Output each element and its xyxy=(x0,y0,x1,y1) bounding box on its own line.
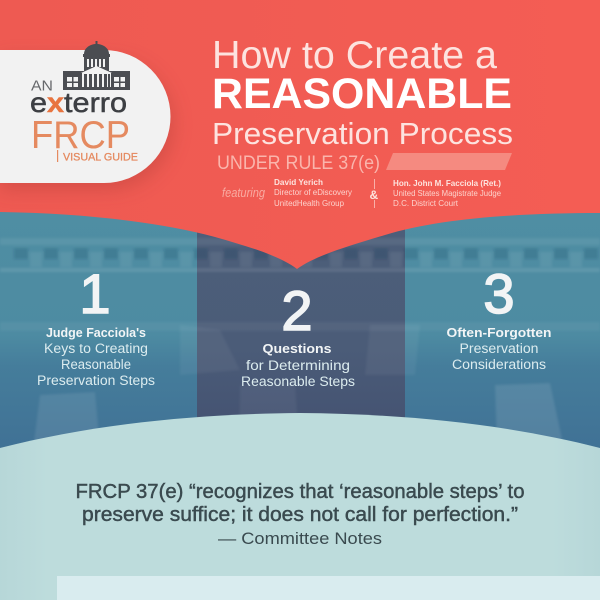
panel: logo badge xyxy=(0,41,170,183)
quote xyxy=(76,481,524,548)
speaker: Hon. John M. Facciola: D.C. District Court xyxy=(393,199,459,208)
column 1: Preservation Steps xyxy=(37,373,155,388)
quote: FRCP 37(e) “recognizes that ‘reasonable steps’ to xyxy=(76,481,524,503)
section edge shading xyxy=(0,413,600,600)
number 3: 3 xyxy=(483,262,515,325)
title: REASONABLE xyxy=(212,70,512,118)
speaker: David Yerich: Director of eDiscovery xyxy=(274,188,352,197)
column 1: Reasonable xyxy=(61,357,131,372)
column 2 xyxy=(241,279,355,389)
speaker: Hon. John M. Facciola: Hon. John M. Facciola (Ret.) xyxy=(393,179,501,188)
column 3: Considerations xyxy=(452,357,546,372)
subtitle: UNDER RULE 37(e) xyxy=(217,152,380,174)
attribution: — Committee Notes xyxy=(218,529,382,548)
panel: centre darker column xyxy=(197,205,405,465)
number 2: 2 xyxy=(281,279,313,342)
lower content box xyxy=(57,576,600,600)
featuring credits xyxy=(222,178,502,208)
speaker: David Yerich xyxy=(274,178,352,208)
panel: logo badge: VISUAL GUIDE xyxy=(63,152,138,164)
heading: Often-Forgotten xyxy=(446,325,552,340)
ampersand xyxy=(370,179,378,208)
title: How to Create a xyxy=(212,34,497,77)
quote: preserve suffice; it does not call for perfection.” xyxy=(82,504,518,526)
column 2: Reasonable Steps xyxy=(241,374,355,389)
panel: light teal quote section xyxy=(0,413,600,600)
title: Preservation Process xyxy=(212,116,513,151)
subtitle bar xyxy=(386,153,512,170)
title xyxy=(212,34,513,151)
speaker: Hon. John M. Facciola: United States Magistrate Judge xyxy=(393,189,502,198)
speaker: Hon. John M. Facciola xyxy=(393,179,502,208)
speaker: David Yerich: UnitedHealth Group xyxy=(274,199,345,208)
logo: exterro: exterro xyxy=(30,87,127,118)
icon: courthouse xyxy=(63,41,130,90)
column 3 xyxy=(446,262,552,372)
column 3: Preservation xyxy=(460,341,538,356)
panel: column photo band xyxy=(0,205,600,465)
text: AN: AN xyxy=(31,78,53,94)
ampersand: & xyxy=(370,188,378,202)
heading: Questions xyxy=(262,341,332,356)
number 1: 1 xyxy=(79,262,111,325)
heading: Judge Facciola's xyxy=(46,325,146,340)
divider and text: visual guide xyxy=(57,150,58,162)
column 1: Keys to Creating xyxy=(44,341,148,356)
featuring credits: featuring xyxy=(222,186,265,200)
header curved overlay xyxy=(0,0,600,269)
background: red header xyxy=(0,0,600,300)
logo badge shadow xyxy=(0,58,174,190)
text: FRCP: FRCP xyxy=(31,114,130,157)
column 2: for Determining xyxy=(246,358,350,373)
speaker: David Yerich: David Yerich xyxy=(274,178,323,187)
column 1 xyxy=(37,262,155,388)
